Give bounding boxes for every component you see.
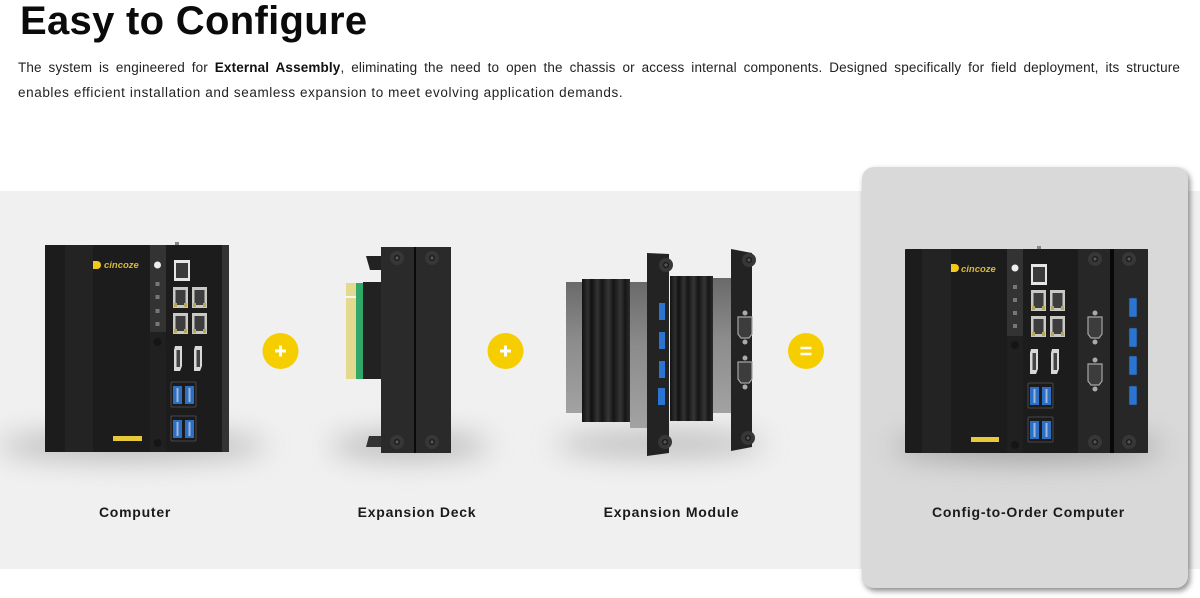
label: expansion deck: Expansion Deck — [358, 504, 476, 520]
label: expansion module: Expansion Module — [604, 504, 739, 520]
product: config-to-order computer — [893, 246, 1163, 461]
product: computer — [0, 242, 267, 460]
icon: plus 1 — [262, 333, 298, 369]
intro text — [18, 60, 1180, 100]
module: USB — [566, 253, 673, 456]
panel: result highlight card — [862, 167, 1188, 588]
intro text: The system is engineered for External Assembly, eliminating the need to open the chassis or access internal components. Designed specifically for field deployment, its structure — [18, 60, 1180, 75]
label: computer: Computer — [99, 504, 171, 520]
product: expansion modules — [555, 249, 765, 457]
module: serial — [670, 249, 756, 451]
product: expansion deck — [330, 247, 490, 459]
label: config-to-order computer: Config-to-Order Computer — [932, 504, 1125, 520]
product: computer: cincoze — [104, 260, 140, 271]
icon: plus 2 — [488, 333, 524, 369]
title: Easy to Configure — [20, 0, 367, 43]
product: config-to-order computer: cincoze — [961, 264, 997, 275]
intro text: enables efficient installation and seamless expansion to meet evolving application demands. — [18, 85, 623, 100]
icon: equals — [788, 333, 824, 369]
panel: grey band — [0, 191, 1200, 569]
